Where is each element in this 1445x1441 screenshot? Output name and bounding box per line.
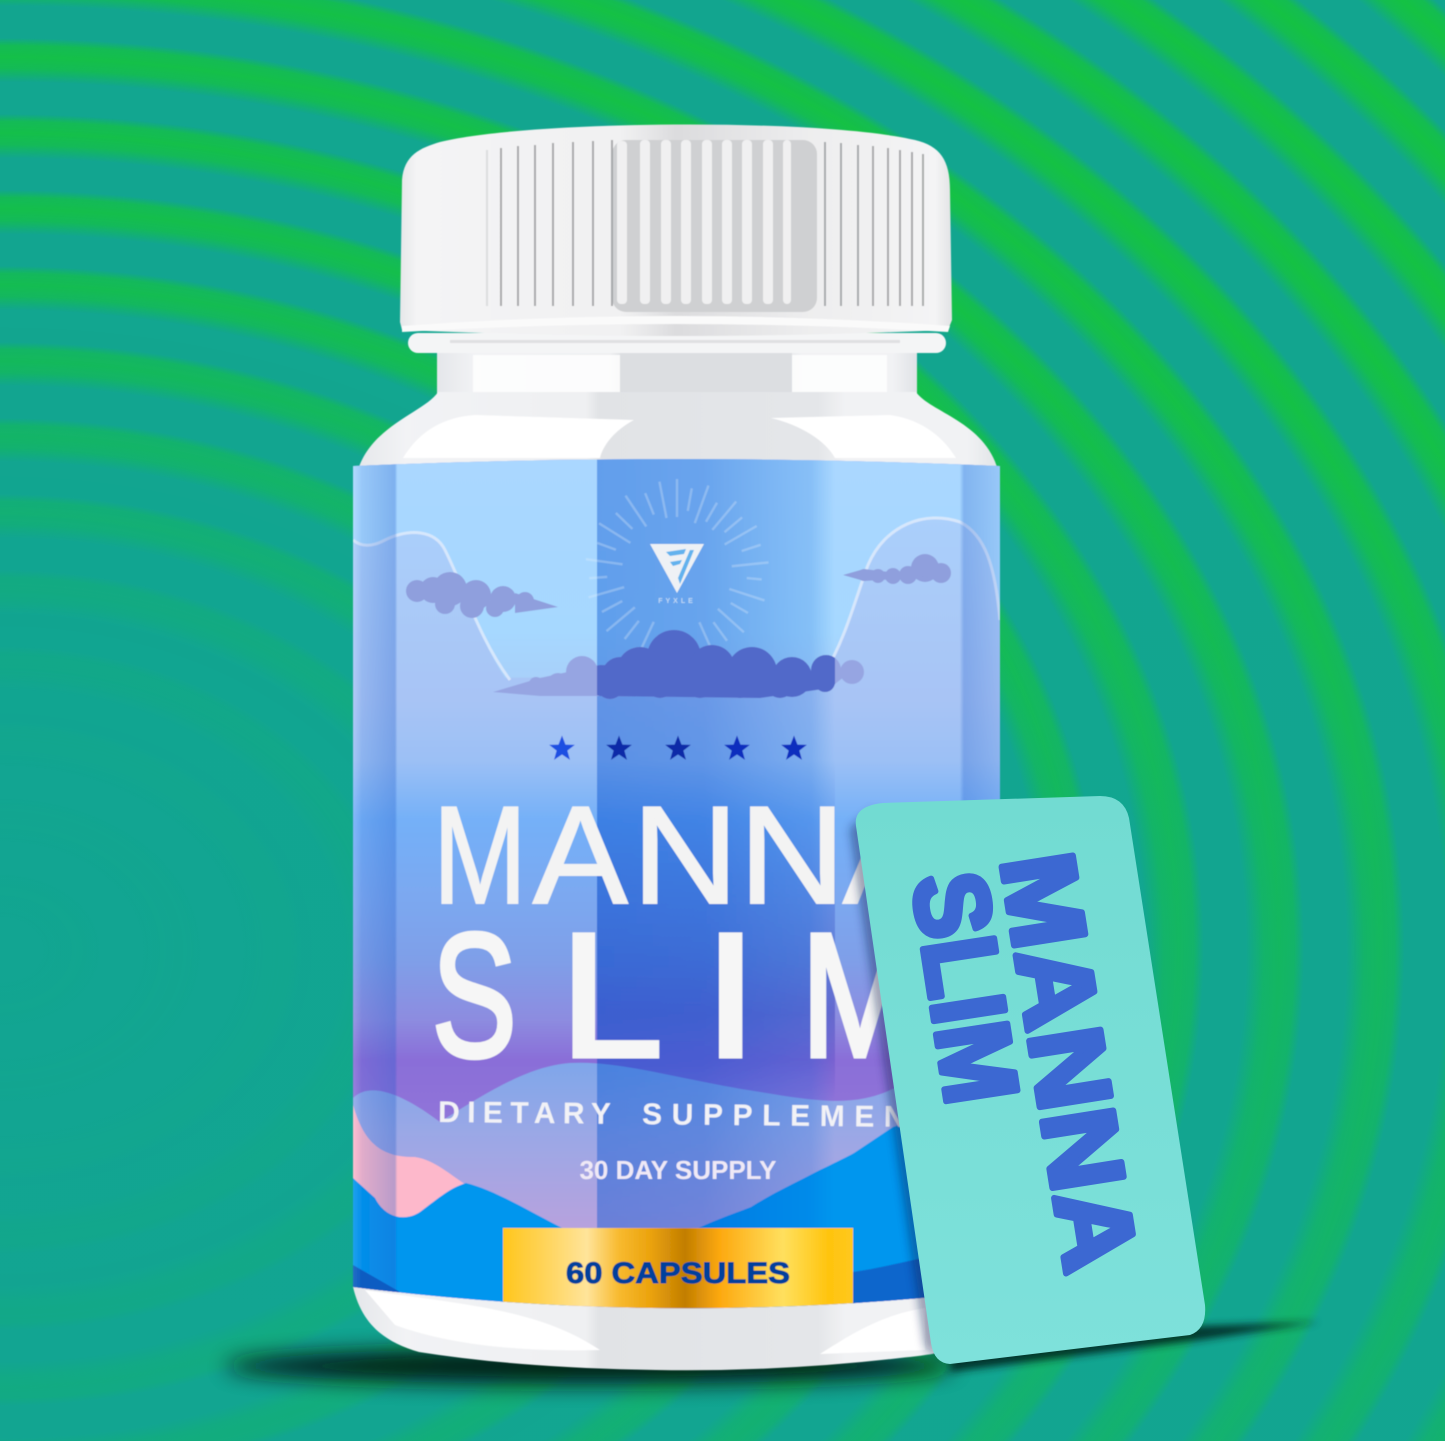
hills — [352, 1062, 898, 1298]
centre cloud — [494, 656, 864, 696]
title: MANNA: M — [433, 778, 527, 933]
card face — [856, 796, 1205, 1364]
centre cloud dark section — [596, 630, 836, 700]
dietary supplement line: SUPPLEMENT — [642, 1098, 943, 1134]
cap centre light ribs — [617, 140, 791, 304]
logo emblem: FYXLE — [658, 598, 696, 605]
pink hill — [353, 1105, 468, 1217]
title: SLIM: I — [704, 897, 757, 1094]
blue hills — [353, 1178, 570, 1310]
centre panel depth shading — [597, 796, 836, 1081]
right cloud — [843, 554, 951, 584]
60 capsules text: 60 CAPSULES — [566, 1257, 790, 1290]
30 day supply: 30 DAY SUPPLY — [579, 1155, 777, 1185]
card drop shadow — [851, 807, 945, 1366]
title: MANNA: N — [632, 778, 738, 933]
title: MANNA — [440, 806, 865, 905]
title: MANNA: N — [739, 778, 845, 933]
teal card leaning on bottle — [851, 796, 1205, 1366]
dietary supplement line: DIETARY — [438, 1096, 618, 1131]
left cloud — [406, 572, 558, 618]
title: MANNA: A — [533, 777, 628, 933]
logo sunburst — [586, 479, 768, 652]
title: SLIM: S — [432, 898, 517, 1094]
card text: MANNA: MANNA — [978, 845, 1159, 1280]
sky with curved outline — [358, 518, 1000, 678]
logo emblem — [650, 544, 704, 605]
ground shadow — [225, 1322, 1320, 1384]
gold capsule band — [503, 1228, 853, 1318]
product bottle — [353, 124, 1000, 1370]
bottom highlights — [365, 1290, 925, 1354]
five stars — [549, 736, 807, 760]
label gradient — [417, 1293, 894, 1306]
bottle neck and ring — [408, 333, 946, 415]
bottle cap — [400, 124, 952, 336]
card text: SLIM: SLIM — [889, 864, 1040, 1111]
shoulder highlights — [403, 415, 956, 458]
title: MANNA: A — [843, 777, 938, 933]
bottle label — [353, 450, 1000, 1330]
title: SLIM: M — [801, 897, 918, 1094]
title: SLIM — [435, 930, 882, 1061]
cap ribs — [487, 140, 923, 306]
title: SLIM: L — [560, 898, 663, 1094]
bottle body — [353, 392, 1000, 1370]
side and centre panel shading — [353, 450, 1000, 1330]
